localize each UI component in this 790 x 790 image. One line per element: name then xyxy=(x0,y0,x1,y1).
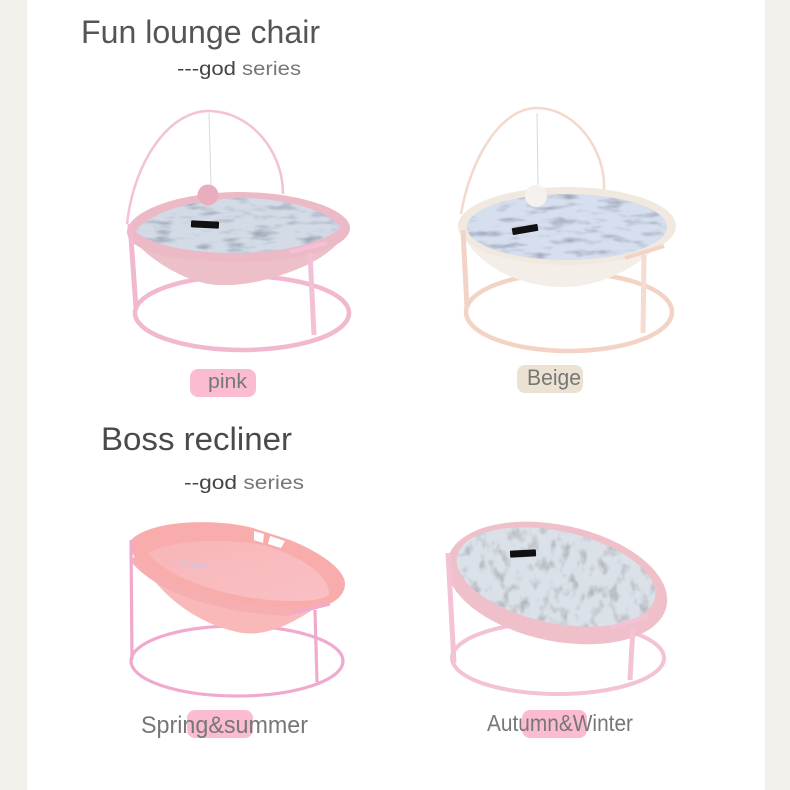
front rim bar xyxy=(290,243,327,252)
pom-pom toy xyxy=(198,184,218,206)
color label: Beige: Beige xyxy=(527,365,581,390)
right leg xyxy=(630,627,633,680)
bowl fabric xyxy=(462,234,668,287)
fur cushion xyxy=(135,198,341,253)
section heading: Boss recliner xyxy=(101,421,304,494)
hanging arch xyxy=(127,111,283,224)
bowl fabric xyxy=(150,575,312,633)
base ring xyxy=(131,626,343,696)
pom-pom toy xyxy=(525,185,547,207)
left leg xyxy=(131,540,132,660)
left leg xyxy=(463,230,467,308)
right leg xyxy=(315,610,317,682)
rim xyxy=(458,187,676,265)
right leg xyxy=(310,253,314,335)
color label: pink: pink xyxy=(208,371,248,393)
brand mark: Henepet xyxy=(179,560,206,571)
subtitle: god series: --god series xyxy=(184,473,304,494)
base ring xyxy=(466,273,672,351)
inner seat xyxy=(148,541,329,601)
section heading: Fun lounge chair: Fun lounge chair xyxy=(81,14,320,50)
subtitle: god series: ---god series xyxy=(177,59,301,80)
fur cushion xyxy=(456,527,656,627)
front rim bar xyxy=(625,246,664,258)
toy string xyxy=(537,113,538,185)
label tag xyxy=(510,549,536,558)
product: spring and summer recliner xyxy=(131,522,345,696)
product: pink lounge chair xyxy=(127,111,350,350)
section heading: Fun lounge chair xyxy=(81,14,320,80)
bowl fabric xyxy=(130,228,349,285)
fur cushion xyxy=(467,194,667,260)
right leg xyxy=(643,255,644,333)
color label: pink xyxy=(190,369,256,397)
left side strip xyxy=(0,0,27,790)
label tag xyxy=(512,224,538,235)
toy string xyxy=(209,113,211,185)
left leg xyxy=(130,224,136,308)
base ring xyxy=(135,276,349,350)
product: beige lounge chair xyxy=(458,108,676,351)
left leg xyxy=(448,553,454,663)
front rim bar xyxy=(610,616,648,628)
rim xyxy=(127,192,350,262)
section heading: Boss recliner: Boss recliner xyxy=(101,421,292,457)
label tag xyxy=(191,220,219,229)
back cutouts xyxy=(254,531,285,548)
outer sling xyxy=(435,503,679,663)
front rim bar xyxy=(290,604,330,614)
base ring xyxy=(452,622,664,694)
front edge xyxy=(133,558,290,612)
product: autumn and winter recliner xyxy=(446,522,668,696)
season label: Autumn&Winter: Autumn&Winter xyxy=(487,710,633,736)
season label: Spring&summer: Spring&summer xyxy=(141,712,308,739)
hanging arch xyxy=(461,108,604,214)
right side strip xyxy=(765,0,790,790)
outer sling xyxy=(131,522,345,615)
